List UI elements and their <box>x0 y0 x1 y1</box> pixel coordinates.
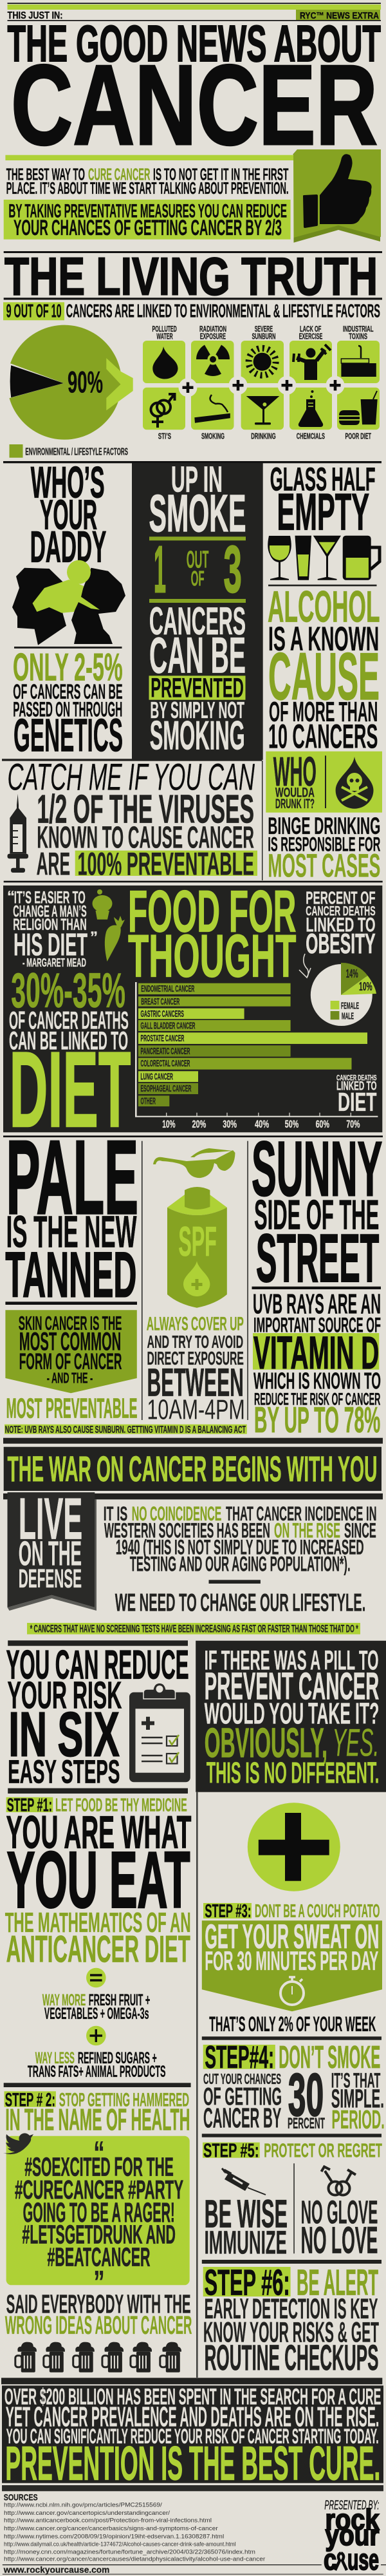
axis labels: 10% <box>162 1118 175 1130</box>
step 6: be alert <box>203 2262 379 2378</box>
icon: twitter bird <box>3 2133 33 2154</box>
subheading: mathematics of an anticancer diet: ANTICANCER DIET <box>6 1929 190 1971</box>
callout: who woulda drunk it: DRUNK IT? <box>275 795 315 811</box>
icon: syringe <box>8 794 28 873</box>
panel: food for thought: OF CANCER DEATHS <box>9 1007 129 1034</box>
intro text: CURE CANCER <box>88 166 150 184</box>
quote: margaret mead: “ <box>7 888 15 905</box>
step 4: don't smoke: CUT YOUR CHANCES <box>203 2070 281 2087</box>
text: way more <box>42 1991 150 2023</box>
step 2: stop getting hammered <box>3 2090 192 2372</box>
text: IN THE NAME OF HEALTH <box>5 2102 190 2136</box>
text block: no coincidence <box>104 1502 376 1617</box>
icon: joined gender symbols <box>322 2166 356 2195</box>
icon: poison drop <box>336 757 373 809</box>
stat: 30-35% linked to diet: 30%-35% <box>11 963 125 1018</box>
icon: water drop <box>152 346 178 379</box>
bar: other: OTHER <box>140 1096 156 1106</box>
panel: up in smoke: 3 <box>224 532 242 606</box>
stat: 1 out of 3: 1 <box>154 532 166 606</box>
axis labels: 30% <box>223 1118 237 1130</box>
heading: reduce your risk in six easy steps <box>6 1643 188 1790</box>
text: binge drinking <box>268 813 380 884</box>
labels: bottom row: STI’S <box>158 431 171 441</box>
step 1: let food be thy medicine: LET FOOD BE THY MEDICINE <box>55 1795 187 1815</box>
axis labels: 50% <box>285 1118 299 1130</box>
text: always cover up: 10AM-4PM <box>147 1394 245 1425</box>
panel: food for thought: DIET <box>9 1030 131 1150</box>
bar: gall bladder: GALL BLADDER CANCER <box>140 1021 196 1032</box>
bar: endometrial: ENDOMETRIAL CANCER <box>141 984 195 994</box>
text: way less: TRANS FATS+ ANIMAL PRODUCTS <box>28 2063 166 2081</box>
labels: top row <box>152 324 374 341</box>
text: be wise immunize <box>205 2192 288 2260</box>
quote: margaret mead: - MARGARET MEAD <box>23 956 86 969</box>
icon: SPF bottle <box>167 1187 227 1308</box>
heading <box>149 459 246 543</box>
step 4: don't smoke <box>203 2040 385 2134</box>
icon: thumbs up ribbon <box>293 149 381 243</box>
sources: http://www.dailymail.co.uk/health/article-1374672/Alcohol-causes-cancer-drink-safe-amount.html <box>4 2541 236 2548</box>
logo: presented by rock your cause <box>324 2499 380 2576</box>
text: way more: VEGETABLES + OMEGA-3s <box>44 2005 149 2023</box>
labels: top row: RADIATION <box>199 324 226 334</box>
icon: equals <box>86 1968 106 1987</box>
ribbon: live on the defense: DEFENSE <box>19 1564 82 1593</box>
bar chart: cancer deaths linked to diet <box>135 982 378 1130</box>
pie chart: obesity: 10% <box>359 980 372 993</box>
text: YOU CAN REDUCE <box>6 1643 188 1688</box>
pie chart: obesity: 14% <box>346 967 358 980</box>
step 6: be alert: STEP #6: <box>205 2262 290 2302</box>
tweet card: #SOEXCITED FOR THE <box>24 2152 174 2181</box>
text: cancers can be prevented: CANCERS <box>149 600 246 643</box>
step 5: protect or regret: STEP #5: <box>203 2139 259 2161</box>
panel: conclusion <box>2 2384 383 2490</box>
bar: gastric: GASTRIC CANCERS <box>140 1009 184 1019</box>
step 3: couch potato <box>202 1901 382 2036</box>
tweet card: “ <box>93 2135 105 2171</box>
icon: cigarette <box>194 395 230 423</box>
panel: food for thought: CAN BE LINKED TO <box>9 1027 128 1055</box>
text: vitamin D <box>253 1289 381 1440</box>
icon: factory <box>341 346 376 377</box>
bar: gall bladder <box>138 1020 291 1032</box>
note bar <box>5 1425 247 1435</box>
tweet card: #LETSGETDRUNK AND <box>22 2219 176 2249</box>
text block: no coincidence: IT IS <box>104 1502 127 1525</box>
callout: who woulda drunk it: WHO <box>273 748 317 795</box>
callout: skin cancer: FORM OF CANCER <box>19 1349 122 1374</box>
panel: pale is the new tanned: MOST PREVENTABLE <box>6 1394 137 1425</box>
heading: you are what you eat: YOU ARE WHAT <box>6 1806 191 1858</box>
text: always cover up <box>147 1314 245 1425</box>
icon: exercise <box>293 345 331 380</box>
banner: get your sweat on <box>202 1918 382 2011</box>
bar: colorectal: COLORECTAL CANCER <box>140 1059 190 1069</box>
axis labels: 40% <box>255 1118 269 1130</box>
text: alcohol is a known cause <box>268 582 380 756</box>
icon: gender symbols <box>151 394 175 428</box>
pie chart: obesity <box>311 963 376 1026</box>
stat: only 2-5% <box>13 646 123 762</box>
heading <box>252 1125 382 1296</box>
axis labels: 70% <box>346 1118 360 1130</box>
masthead <box>8 3 381 21</box>
labels: bottom row: SMOKING <box>201 431 225 441</box>
quote: margaret mead: CHANGE A MAN’S <box>13 902 87 920</box>
icon: clipboard checklist <box>129 1683 190 1782</box>
step 4: don't smoke: PERCENT <box>288 2115 325 2132</box>
ribbon: live on the defense: ON THE <box>19 1535 82 1573</box>
icon: four glasses <box>268 536 380 580</box>
callout: skin cancer: MOST COMMON <box>19 1328 121 1356</box>
bar: esophageal <box>138 1083 198 1094</box>
text block: no coincidence: NO COINCIDENCE <box>132 1502 221 1525</box>
callout: skin cancer: SKIN CANCER IS THE <box>19 1312 122 1334</box>
icon: cupcake <box>93 889 112 920</box>
pie chart: 90 percent: 90% <box>68 365 103 399</box>
bar: pancreatic <box>138 1045 291 1057</box>
intro bar <box>5 155 297 160</box>
chart title <box>336 1074 377 1117</box>
text: no glove no love <box>301 2194 378 2261</box>
heading: UP IN <box>171 459 223 499</box>
panel: catch me if you can <box>8 757 257 882</box>
ribbon: live on the defense: LIVE <box>19 1486 82 1551</box>
text: said everybody: SAID EVERYBODY WITH THE <box>6 2289 191 2319</box>
icon: sun <box>249 348 276 375</box>
icon: sunglasses <box>153 1148 235 1178</box>
logo: presented by rock your cause: c <box>324 2543 336 2576</box>
panel: up in smoke: SMOKING <box>150 713 245 758</box>
bar: breast <box>138 996 291 1007</box>
text: cancers can be prevented: PREVENTED <box>151 673 244 704</box>
step 4: don't smoke: STEP#4: <box>205 2040 274 2075</box>
text: percent linked to obesity <box>306 887 376 960</box>
arrow <box>299 954 311 978</box>
step 4: don't smoke: 30 <box>288 2061 324 2128</box>
text: way more: WAY MORE <box>42 1991 86 2009</box>
step 1: let food be thy medicine: STEP #1: <box>7 1795 52 1815</box>
labels: top row: EXPOSURE <box>200 332 226 341</box>
icon: plus <box>86 2026 106 2045</box>
bar: prostate: PROSTATE CANCER <box>140 1034 185 1044</box>
pie chart: obesity: FEMALE <box>341 1001 359 1012</box>
quote: margaret mead: RELIGION THAN <box>13 916 87 934</box>
quote: margaret mead: ” <box>90 929 98 946</box>
heading <box>5 1118 138 1310</box>
text: GENETICS <box>14 710 123 762</box>
heading: TANNED <box>5 1238 136 1310</box>
panel: always cover up <box>147 1148 245 1425</box>
labels: bottom row: DRINKING <box>251 431 276 441</box>
icon: syringe <box>222 2168 266 2195</box>
heading <box>270 461 376 542</box>
logo: presented by rock your cause: rock <box>326 2503 380 2536</box>
subheading: 9 out of 10: 9 OUT OF 10 <box>6 301 62 322</box>
sources: SOURCES <box>4 2493 38 2503</box>
icon: radiation <box>196 345 230 376</box>
sources: http://www.ncbi.nlm.nih.gov/pmc/articles/PMC2515569/ <box>4 2502 162 2509</box>
labels: top row: LACK OF <box>300 324 321 334</box>
footer url: www.rockyourcause.com <box>3 2564 109 2575</box>
intro text: THE BEST WAY TO <box>6 166 85 184</box>
axis labels: 20% <box>192 1118 206 1130</box>
pie chart: 90 percent <box>9 325 133 440</box>
intro text <box>6 166 289 198</box>
axis labels <box>162 1118 360 1130</box>
labels: top row: SEVERE <box>255 324 273 334</box>
icon: SPF bottle: SPF <box>178 1218 217 1265</box>
icon: beer mugs <box>15 2342 181 2372</box>
text: way less: WAY LESS <box>35 2049 75 2067</box>
callout: skin cancer <box>5 1310 137 1393</box>
ribbon: live on the defense <box>8 1486 96 1611</box>
step 5: protect or regret <box>203 2139 382 2261</box>
text: viruses <box>37 786 257 882</box>
callout: skin cancer: - AND THE - <box>47 1370 93 1387</box>
icon: parents and baby silhouette <box>12 560 125 645</box>
bar: pancreatic: PANCREATIC CANCER <box>140 1046 190 1057</box>
heading: YOUR <box>40 491 97 538</box>
axis labels: 60% <box>316 1118 329 1130</box>
bar: colorectal <box>138 1058 351 1070</box>
stat: 1 out of 3 <box>154 532 242 606</box>
labels: top row: SUNBURN <box>252 332 275 341</box>
panel: up in smoke <box>132 459 263 760</box>
text: always cover up: AND TRY TO AVOID <box>147 1332 243 1352</box>
quote: margaret mead: IT’S EASIER TO <box>14 888 86 907</box>
text: BETWEEN <box>147 1360 244 1405</box>
tiles <box>143 341 380 430</box>
labels: bottom row: CHEMCIALS <box>297 431 325 441</box>
labels: bottom row <box>158 431 371 441</box>
heading: you are what you eat <box>6 1806 191 1925</box>
bar: prostate <box>138 1032 367 1044</box>
panel: who's your daddy <box>12 458 125 762</box>
heading: SMOKE <box>149 484 246 543</box>
plus connectors <box>179 376 345 397</box>
subheading: mathematics of an anticancer diet: THE MATHEMATICS OF AN <box>5 1908 191 1938</box>
labels: top row: EXERCISE <box>299 332 322 341</box>
text: said everybody <box>5 2289 192 2340</box>
tweet card: #BEATCANCER <box>48 2242 150 2271</box>
stat: 30-35% linked to diet <box>9 963 131 1150</box>
text: PASSED ON THROUGH <box>13 697 122 721</box>
labels: top row: WATER <box>156 332 173 341</box>
callout: who woulda drunk it: WOULDA <box>275 784 315 800</box>
icon: stopwatch <box>280 1977 304 2005</box>
icon: big plus <box>248 1803 340 1891</box>
panel: pale is the new tanned: PALE <box>6 1118 138 1236</box>
panel: who's your daddy: OF CANCERS CAN BE <box>13 680 123 703</box>
step 1: let food be thy medicine <box>5 1795 191 2081</box>
heading: reduce your risk in six easy steps: IN SIX <box>8 1700 120 1770</box>
text: cancers can be prevented: BY SIMPLY NOT <box>150 697 244 723</box>
subheading: mathematics of an anticancer diet <box>5 1908 191 1971</box>
step 3: couch potato: STEP #3: <box>205 1901 251 1922</box>
legend: environmental factors: ENVIRONMENTAL / LIFESTYLE FACTORS <box>25 447 128 458</box>
text: cancers can be prevented <box>149 600 246 758</box>
tweet card: #CURECANCER #PARTY <box>15 2175 183 2204</box>
icon grid: risk factors <box>143 324 380 441</box>
panel: food for thought <box>3 879 382 1150</box>
panel: glass half empty <box>266 461 382 884</box>
panel: sunny side of the street <box>252 1125 382 1440</box>
text: always cover up: DIRECT EXPOSURE <box>147 1349 244 1369</box>
bar: esophageal: ESOPHAGEAL CANCER <box>140 1084 192 1094</box>
icon: carrot <box>105 916 125 961</box>
heading: reduce your risk in six easy steps: EASY STEPS <box>8 1753 120 1790</box>
sources: http://www.nytimes.com/2008/09/19/opinion/19iht-edservan.1.16308287.html <box>4 2533 224 2540</box>
callout: who woulda drunk it <box>266 748 382 813</box>
heading <box>128 879 296 990</box>
icon: burger and drink <box>339 391 378 425</box>
text: way more: FRESH FRUIT + <box>89 1991 150 2009</box>
text: be wise immunize: BE WISE <box>205 2192 288 2235</box>
bar: endometrial <box>138 983 291 994</box>
step 4: don't smoke: CANCER BY <box>203 2103 281 2134</box>
bar: breast: BREAST CANCER <box>141 997 180 1007</box>
sources <box>4 2493 265 2562</box>
text: way less: REFINED SUGARS + <box>78 2049 157 2067</box>
panel: pale is the new tanned <box>5 1118 247 1435</box>
stat: 1 out of 3: OUT <box>187 547 208 574</box>
text: way less <box>28 2049 166 2081</box>
stat: 1 out of 3: OF <box>191 566 205 590</box>
pie chart: obesity: MALE <box>342 1011 354 1021</box>
step 2: stop getting hammered: STOP GETTING HAMMERED <box>59 2090 189 2111</box>
step 4: don't smoke: OF GETTING <box>203 2083 282 2110</box>
labels: top row: TOXINS <box>349 332 367 341</box>
icon: flask <box>299 390 323 427</box>
heading: reduce your risk in six easy steps: YOUR RISK <box>8 1674 122 1717</box>
step 2: stop getting hammered: STEP # 2: <box>5 2090 55 2111</box>
sources: http://www.cancer.org/cancer/cancercauses/dietandphysicalactivity/alcohol-use-and-cancer <box>4 2555 265 2562</box>
heading: you are what you eat: YOU EAT <box>7 1837 190 1925</box>
text: viruses: ARE <box>37 845 70 882</box>
text: be wise immunize: IMMUNIZE <box>205 2224 287 2260</box>
quote: margaret mead: HIS DIET <box>14 927 87 962</box>
tweet card: GOING TO BE A RAGER! <box>23 2197 175 2228</box>
bar: lung: LUNG CANCER <box>140 1072 173 1082</box>
sources: http://money.cnn.com/magazines/fortune/fortune_archive/2004/03/22/365076/index.htm <box>4 2549 255 2556</box>
icon: martini <box>246 396 279 425</box>
labels: top row: POLLUTED <box>152 324 177 334</box>
text: always cover up: ALWAYS COVER UP <box>147 1314 244 1335</box>
panel: up in smoke: CAN BE <box>149 626 246 683</box>
callout: reduce chances by 2/3 <box>4 200 291 240</box>
stat: only 2-5%: ONLY 2-5% <box>13 646 123 689</box>
tweet card <box>6 2135 190 2300</box>
panel: if there was a pill <box>196 1641 386 1792</box>
heading: IS THE NEW <box>6 1207 136 1257</box>
heading: WHO’S <box>31 458 105 507</box>
panel: who's your daddy: DADDY <box>30 522 106 571</box>
sources: http://www.anticancerbook.com/post/Protection-from-viral-infections.html <box>4 2517 212 2524</box>
quote: margaret mead <box>7 888 98 969</box>
legend: environmental factors <box>9 444 128 458</box>
sources: http://www.cancer.org/cancer/cancerbasics/signs-and-symptoms-of-cancer <box>4 2525 218 2532</box>
tweet card: ” <box>93 2264 105 2300</box>
sources: http://www.cancer.gov/cancertopics/understandingcancer/ <box>4 2510 170 2517</box>
heading <box>30 458 106 571</box>
kicker: this just in: THIS JUST IN: <box>8 10 63 21</box>
